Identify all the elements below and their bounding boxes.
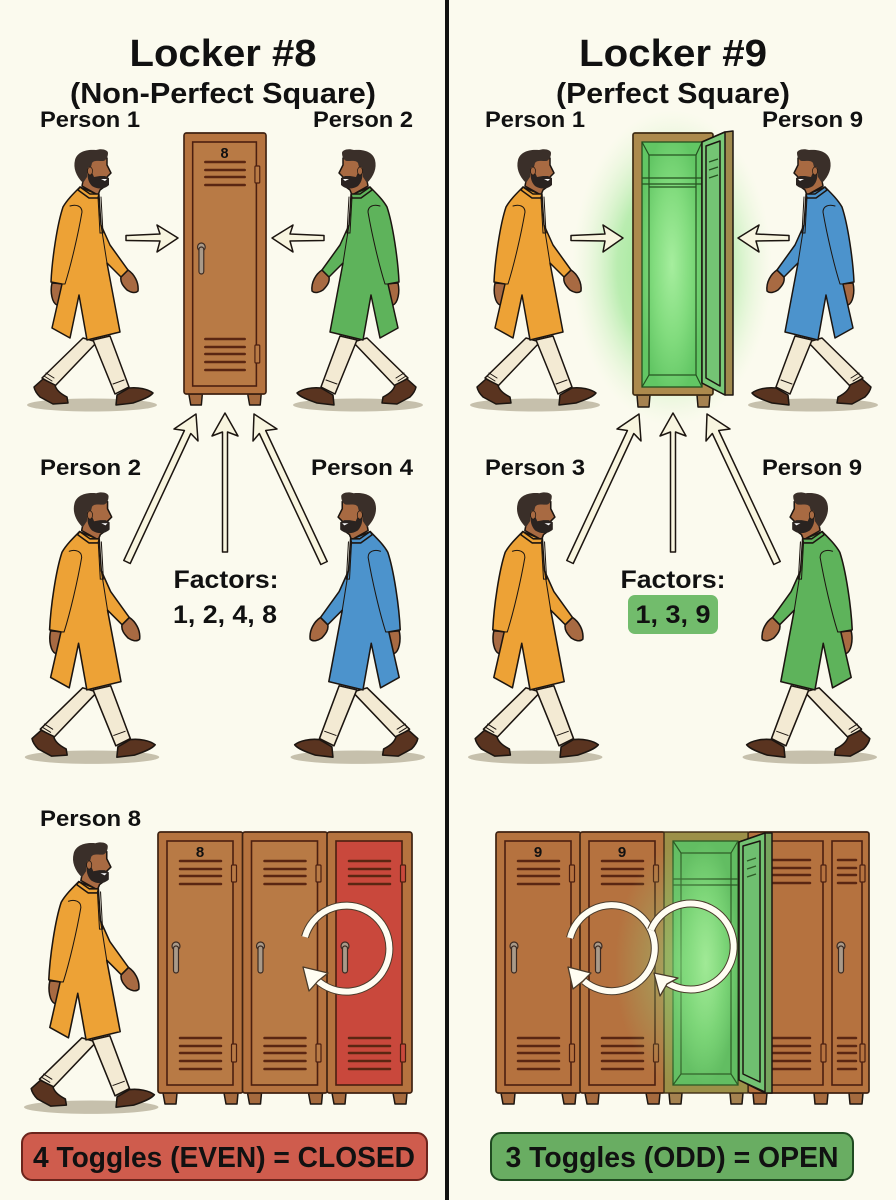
locker glow (572, 110, 772, 426)
person 1 orange right (470, 149, 600, 411)
arrow: person 1 to open locker (571, 225, 623, 252)
result banner closed: 4 Toggles (EVEN) = CLOSED (33, 1142, 415, 1174)
toggle arrow left loop (568, 905, 655, 991)
locker glow spill (615, 845, 745, 1085)
arrow: person 2 to locker (272, 225, 324, 252)
result banner open: 3 Toggles (ODD) = OPEN (506, 1142, 838, 1174)
arrow: factors up (212, 413, 238, 552)
locker 1 number 9: 9 (534, 844, 542, 861)
factors list 8: 1, 2, 4, 8 (173, 601, 277, 629)
factors list 8 (173, 566, 278, 629)
person 4 blue (291, 492, 425, 764)
label: person 8: Person 8 (40, 806, 141, 831)
person 9 green (743, 492, 877, 764)
panel: locker 9 (468, 33, 878, 1180)
label: person 2: Person 2 (313, 107, 413, 132)
label: person 2 middle: Person 2 (40, 455, 141, 480)
label: person 1 right: Person 1 (485, 107, 585, 132)
label: person 9 middle: Person 9 (762, 455, 862, 480)
subtitle: perfect square: (Perfect Square) (556, 78, 790, 110)
locker 5 partial (748, 832, 869, 1104)
toggle arrow right loop (651, 904, 734, 996)
title: locker 8: Locker #8 (130, 33, 316, 75)
person 2 orange middle (25, 492, 159, 764)
centre divider (445, 0, 449, 1200)
result banner open (491, 1133, 853, 1180)
locker 2 (242, 832, 328, 1104)
locker 1 number 9 (496, 832, 581, 1104)
locker 1 with number (158, 832, 243, 1104)
locker row closed (158, 832, 412, 1104)
factors list 9: 1, 3, 9 (636, 601, 710, 629)
arrow: person 3 factor (567, 414, 641, 564)
person 2 green (293, 149, 423, 411)
arrow: person 9 factor (706, 414, 780, 564)
label: person 3: Person 3 (485, 455, 585, 480)
factors list 9: Factors: (620, 566, 726, 594)
label: person 1: Person 1 (40, 107, 140, 132)
locker row with open locker (496, 832, 869, 1104)
title: locker 9: Locker #9 (579, 33, 767, 75)
arrow: person 2 factor (124, 414, 198, 564)
locker 8 closed (184, 133, 266, 405)
label: person 9 right: Person 9 (762, 107, 863, 132)
arrow: factors up right (660, 413, 686, 552)
locker 2 number 9: 9 (618, 844, 626, 861)
person 3 orange (468, 492, 602, 764)
person 8 orange (24, 842, 158, 1114)
person 9 blue (748, 149, 878, 411)
arrow: person 9 to open locker (738, 225, 789, 252)
arrow: person 4 factor (253, 414, 327, 564)
arrow: person 1 to locker (126, 225, 178, 252)
subtitle: non-perfect square: (Non-Perfect Square) (70, 78, 376, 110)
person 1 orange (27, 149, 157, 411)
factors list 8: Factors: (174, 566, 278, 594)
locker 1 with number: 8 (196, 844, 204, 861)
locker 3 red (327, 832, 412, 1104)
locker 2 number 9 (580, 832, 665, 1104)
panel: locker 8 (22, 33, 427, 1180)
label: person 4: Person 4 (311, 455, 414, 480)
result banner closed (22, 1133, 427, 1180)
locker 9 open (633, 131, 733, 407)
factors list 9 (620, 566, 726, 634)
toggle arrow (303, 906, 389, 992)
open locker green (664, 832, 772, 1104)
locker 8 closed: 8 (221, 146, 229, 162)
